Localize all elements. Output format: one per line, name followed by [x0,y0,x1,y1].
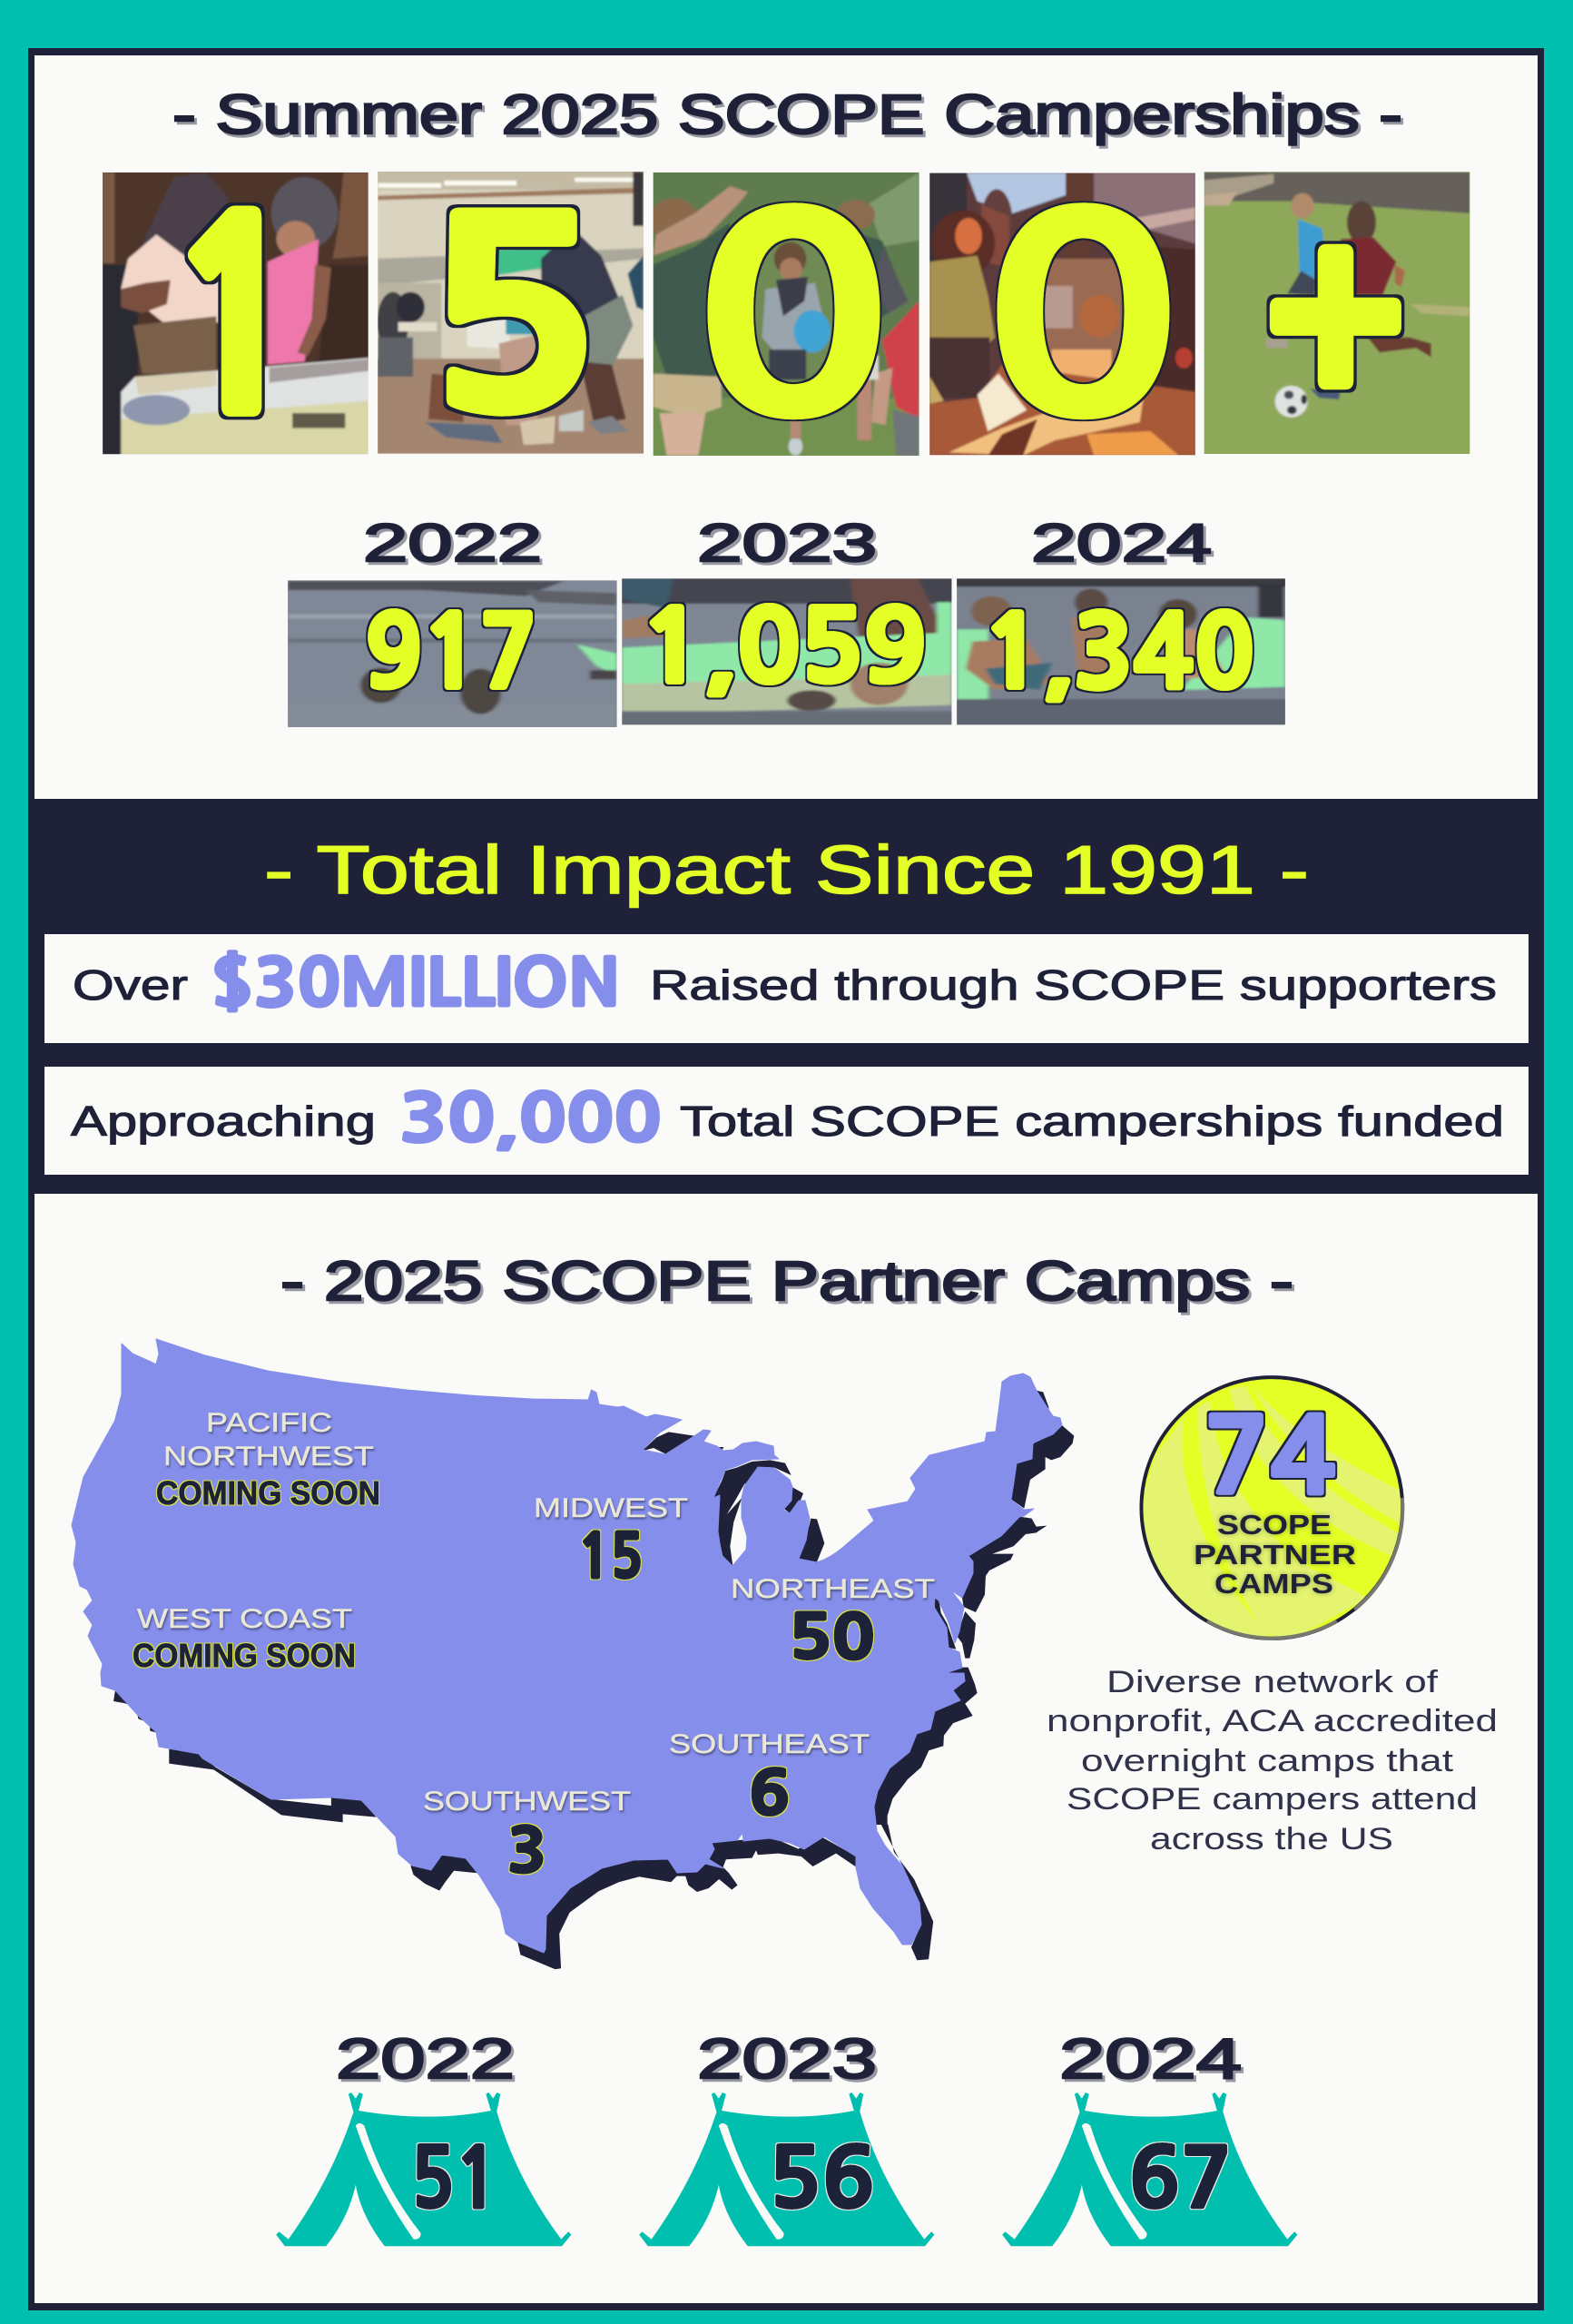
photo: keyboard [100,168,375,458]
icon: tent [639,2093,934,2246]
label: Pacific Northwest: NORTHWEST [163,1442,374,1472]
label: Southwest: SOUTHWEST [423,1787,631,1817]
big number: 1500+ [169,183,1407,456]
section: Summer 2025 camperships [100,84,1480,729]
number 1,340: 1,340 [983,604,1253,702]
digit 0: 0 [978,183,1181,456]
circle with stripes [1123,1376,1406,1640]
box [44,1067,1529,1175]
description text: nonprofit, ACA accredited [1047,1704,1498,1738]
label: West Coast [133,1604,356,1674]
label: Southeast: SOUTHEAST [669,1729,870,1759]
label: Southwest: 3 [507,1821,546,1881]
description text: overnight camps that [1081,1744,1454,1778]
box [44,934,1529,1043]
photo: campfire [928,168,1200,458]
year heading 2023: 2023 [697,514,877,573]
caption [1194,1509,1356,1600]
description text: Diverse network of [1106,1665,1439,1699]
label: Southwest [423,1787,631,1881]
label: Northeast: 50 [789,1608,874,1668]
photo: lake 2024 [953,576,1291,728]
badge: 74 partner camps [1123,1376,1406,1640]
icon: tent [1002,2093,1297,2246]
label: Midwest [534,1493,688,1587]
description text [1047,1665,1498,1856]
photo: soccer [1198,168,1480,458]
text: Approaching: Approaching [71,1098,376,1145]
label: Southeast: 6 [749,1764,790,1824]
label: Midwest: MIDWEST [534,1493,688,1523]
section: partner camps [72,1250,1498,2246]
stat: $30MILLION: $30MILLION [211,950,620,1016]
number 74: 74 [1204,1405,1336,1509]
heading: - 2025 SCOPE Partner Camps - [280,1250,1293,1312]
label: Northeast [731,1574,935,1668]
dark band [28,799,1544,1194]
map of the United States [72,1339,1074,1969]
panel: total impact [28,799,1544,1194]
number: 67 [1128,2138,1233,2221]
number: 56 [768,2138,875,2221]
photo: lake 2022 [281,578,622,729]
icon: tent [276,2093,571,2246]
label: Pacific Northwest: PACIFIC [206,1408,332,1438]
map shadow: north and east [642,1391,1074,1825]
year heading 2024: 2024 [1031,514,1212,573]
digit 0: 0 [688,183,891,456]
stat box: raised [44,934,1529,1043]
description text: across the US [1150,1822,1393,1856]
year: 2023 [697,2028,877,2091]
year heading 2022: 2022 [363,514,542,573]
number 1,059: 1,059 [641,598,927,696]
photo: campers under arms [649,168,924,458]
heading: - Total Impact Since 1991 - [264,832,1309,908]
photo: group hug [375,168,647,458]
label: Midwest: 15 [578,1527,643,1587]
digit 1: 1 [169,190,305,448]
partner count 2024 [1002,2028,1297,2246]
text: Over: Over [73,961,188,1009]
stat: 30,000: 30,000 [399,1087,661,1151]
map landmass [72,1339,1062,1953]
heading: - Summer 2025 SCOPE Camperships - [172,84,1402,145]
partner count 2022 [276,2028,571,2246]
label: West Coast: COMING SOON [133,1637,356,1674]
label: Pacific Northwest [156,1408,380,1512]
text: total camperships funded: Total SCOPE camperships funded [680,1098,1504,1145]
label: West Coast: WEST COAST [137,1604,352,1634]
year: 2024 [1059,2028,1242,2091]
text: raised through supporters: Raised through SCOPE supporters [650,961,1497,1009]
digit 5: 5 [423,190,599,448]
year: 2022 [336,2028,515,2091]
caption: SCOPE [1217,1509,1332,1541]
label: Southeast [669,1729,870,1824]
number: 51 [410,2138,499,2221]
partner count 2023 [639,2028,934,2246]
caption: CAMPS [1214,1568,1333,1600]
number 917: 917 [365,604,537,702]
description text: SCOPE campers attend [1067,1782,1478,1817]
label: Pacific Northwest: COMING SOON [156,1474,380,1512]
map shadow: south and west [113,1690,933,1969]
label: Northeast: NORTHEAST [731,1574,935,1604]
stat box: camperships [44,1067,1529,1175]
caption: PARTNER [1194,1539,1356,1571]
photo: lake 2023 [619,576,956,728]
plus sign: + [1263,201,1407,446]
